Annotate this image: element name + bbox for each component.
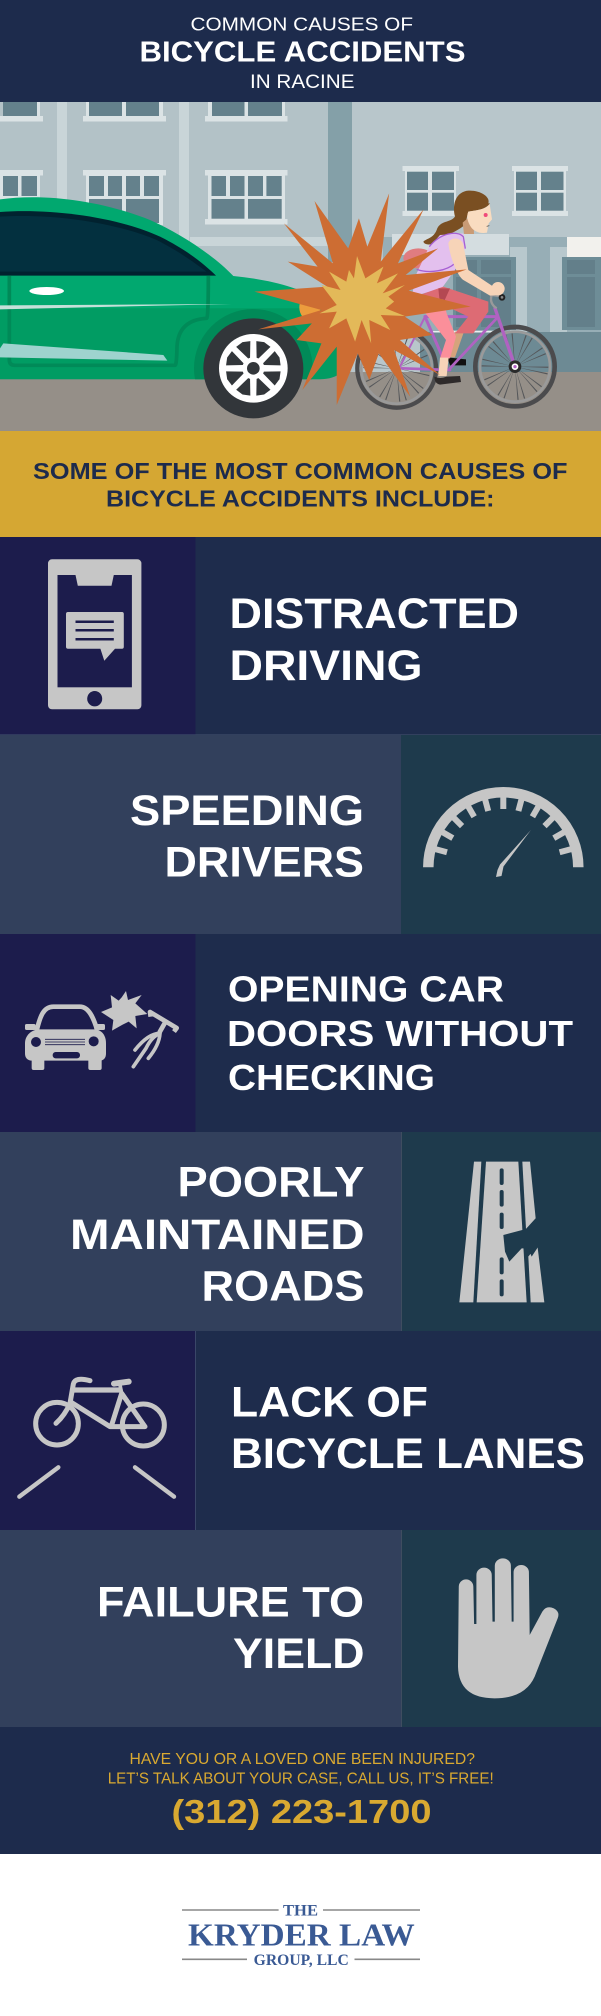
- panel: call to action footer: [0, 1727, 601, 1854]
- label: distracted driving: [230, 591, 519, 690]
- panel: failure to yield: [0, 1530, 601, 1727]
- far leg: [449, 332, 464, 357]
- car window: [0, 211, 216, 276]
- green car: [0, 190, 347, 428]
- bicycle frame: [400, 308, 515, 370]
- rear wheel: [357, 329, 436, 408]
- label: opening car doors without checking: CHECKING: [228, 1057, 435, 1098]
- arm: [448, 239, 500, 296]
- label: speeding drivers: SPEEDING: [130, 788, 364, 835]
- cyclist on bicycle: [357, 191, 555, 408]
- label: failure to yield: FAILURE TO: [97, 1580, 364, 1627]
- trousers: [415, 287, 488, 333]
- car wheel: [203, 318, 303, 418]
- icon: car hitting bicycle: [25, 991, 177, 1070]
- intro heading: [33, 458, 568, 512]
- phone number: (312) 223-1700: [172, 1793, 432, 1830]
- road: [0, 372, 601, 431]
- label: distracted driving: DISTRACTED: [230, 591, 519, 638]
- label: lack of bicycle lanes: LACK OF: [231, 1380, 428, 1427]
- intro heading: BICYCLE ACCIDENTS INCLUDE:: [106, 486, 494, 512]
- icon: damaged road: [459, 1162, 544, 1302]
- panel: title header: [0, 0, 601, 102]
- handlebar: [490, 295, 500, 310]
- title line: bicycle accidents: BICYCLE ACCIDENTS: [140, 36, 466, 68]
- icon: raised hand: [458, 1558, 558, 1698]
- panel: law firm logo: THE: [283, 1903, 318, 1920]
- label: lack of bicycle lanes: BICYCLE LANES: [231, 1431, 585, 1478]
- panel: collision illustration: [0, 102, 601, 431]
- shirt: [412, 233, 465, 297]
- body highlights: [0, 304, 232, 309]
- label: opening car doors without checking: DOORS WITHOUT: [227, 1013, 573, 1054]
- label: opening car doors without checking: OPENING CAR: [228, 969, 504, 1010]
- call to action text: HAVE YOU OR A LOVED ONE BEEN INJURED?: [130, 1751, 475, 1768]
- panel: speeding drivers: [0, 735, 601, 934]
- title line: in racine: IN RACINE: [250, 72, 354, 93]
- headlight: [299, 304, 320, 316]
- title line: common causes of: COMMON CAUSES OF: [190, 14, 413, 35]
- door handle: [29, 287, 64, 295]
- panel: law firm logo: KRYDER LAW: [188, 1917, 415, 1953]
- label: speeding drivers: DRIVERS: [164, 840, 364, 887]
- neck: [462, 218, 474, 234]
- hair: [423, 191, 490, 244]
- label: poorly maintained roads: MAINTAINED: [70, 1212, 364, 1259]
- label: poorly maintained roads: POORLY: [178, 1160, 364, 1207]
- face: [467, 204, 492, 233]
- call to action text: [108, 1751, 494, 1787]
- intro heading: SOME OF THE MOST COMMON CAUSES OF: [33, 458, 568, 484]
- label: distracted driving: DRIVING: [230, 643, 422, 690]
- panel: distracted driving: [0, 537, 601, 735]
- icon: bicycle between lane lines: [19, 1379, 174, 1497]
- panel: gold intro banner: [0, 431, 601, 537]
- label: failure to yield: YIELD: [233, 1631, 364, 1678]
- icon: smartphone with message: [48, 559, 141, 709]
- label: poorly maintained roads: [70, 1160, 364, 1311]
- panel: law firm logo: GROUP, LLC: [254, 1952, 349, 1969]
- panel: poorly maintained roads: [0, 1132, 601, 1331]
- front wheel: [475, 327, 555, 406]
- car door outline: [9, 276, 208, 365]
- call to action text: LET’S TALK ABOUT YOUR CASE, CALL US, IT’S FREE!: [108, 1770, 494, 1787]
- building facade: [0, 102, 601, 372]
- impact burst: [254, 193, 471, 405]
- label: poorly maintained roads: ROADS: [202, 1264, 364, 1311]
- panel: law firm logo: [0, 1854, 601, 2016]
- panel: opening car doors: [0, 934, 601, 1132]
- label: failure to yield: [97, 1580, 364, 1678]
- backpack: [403, 248, 428, 268]
- label: opening car doors without checking: [227, 969, 573, 1098]
- label: speeding drivers: [130, 788, 364, 887]
- label: lack of bicycle lanes: [231, 1380, 585, 1478]
- shoe: [434, 376, 461, 385]
- panel: lack of bicycle lanes: [0, 1331, 601, 1530]
- icon: speedometer: [428, 792, 578, 877]
